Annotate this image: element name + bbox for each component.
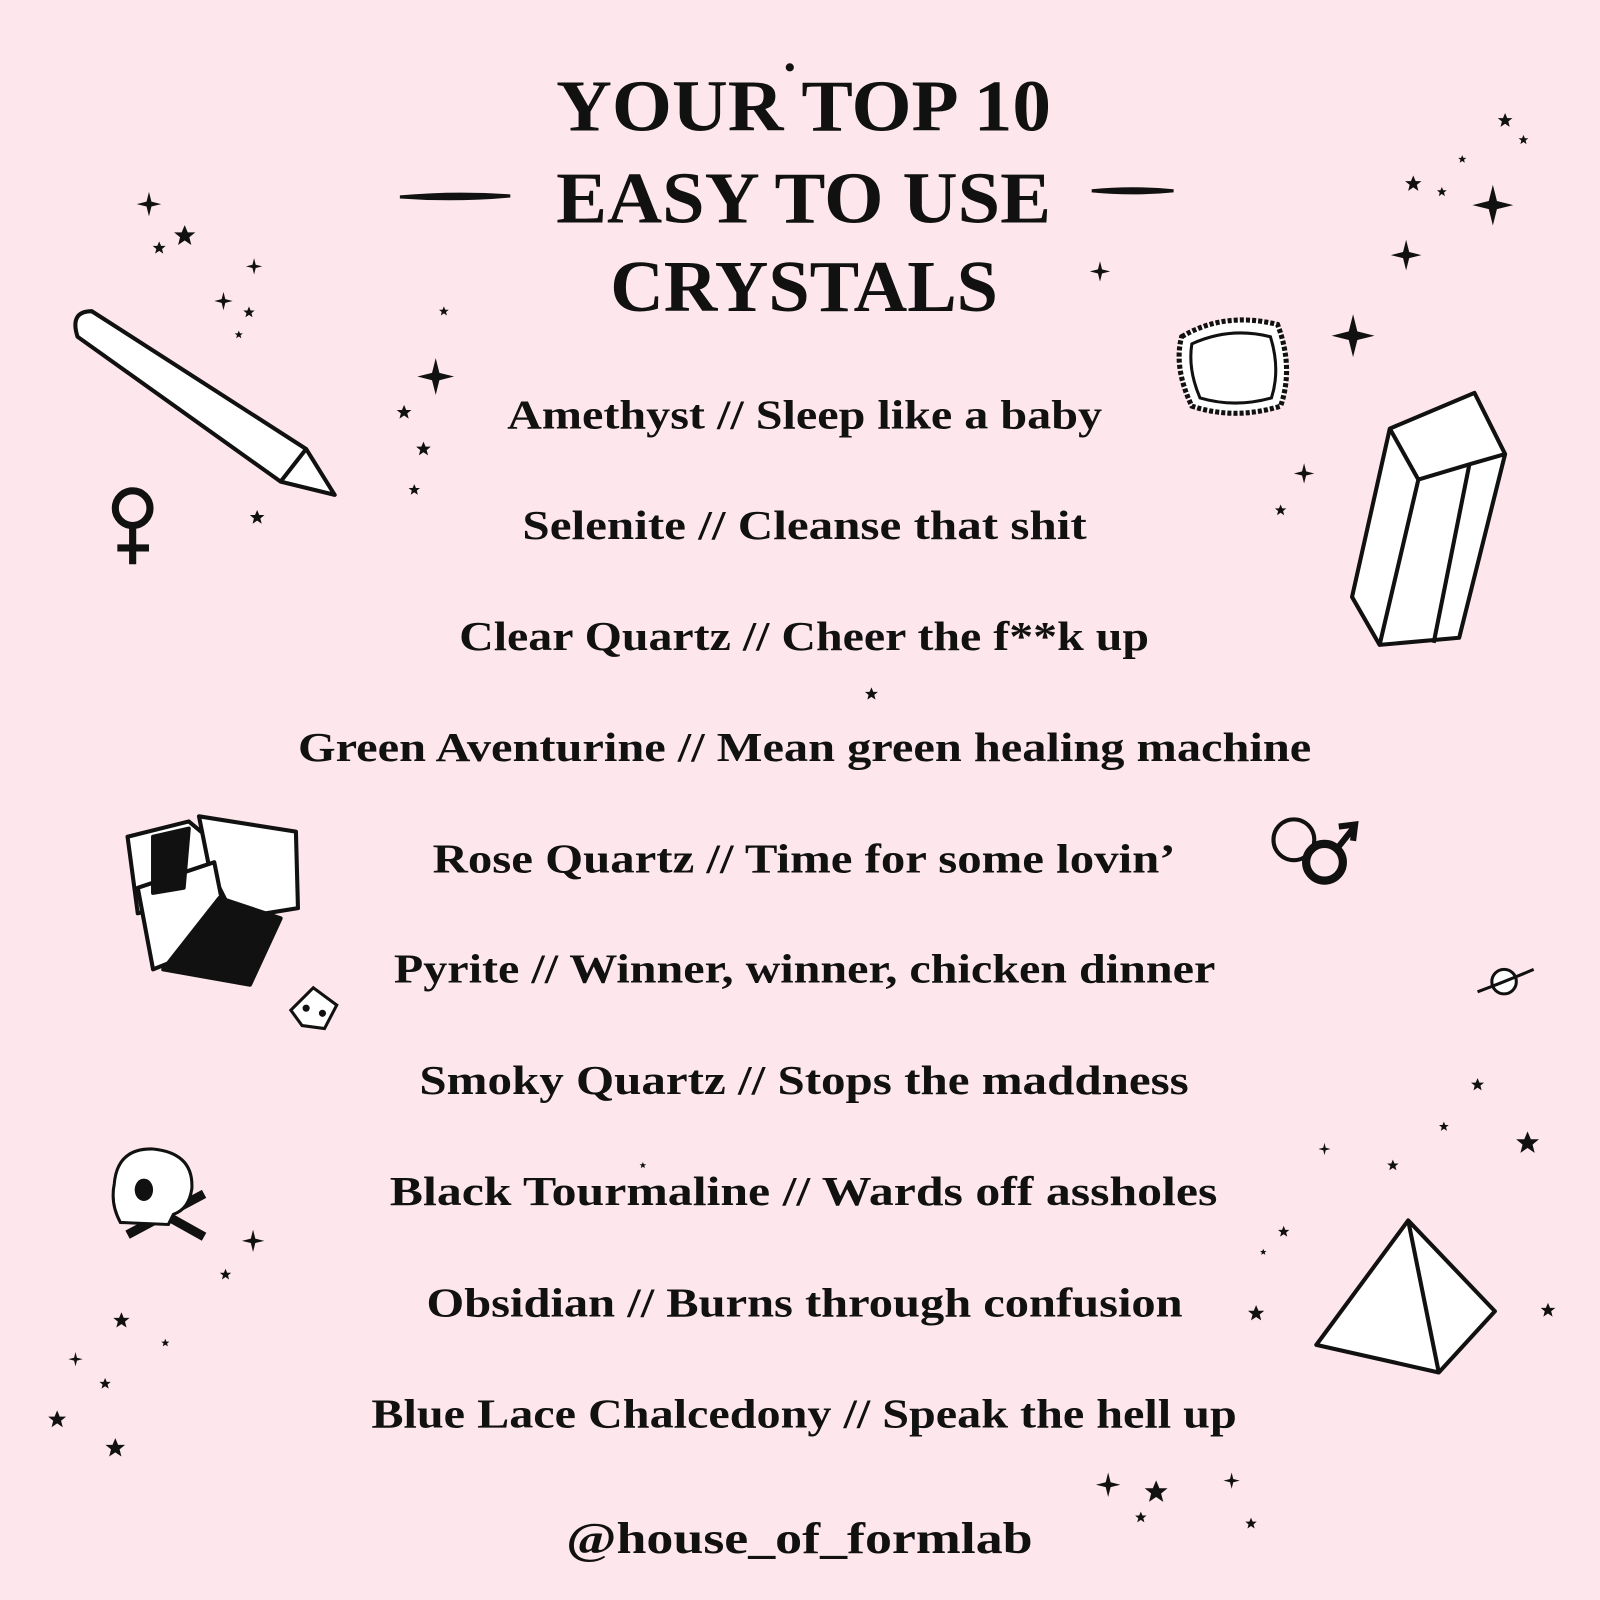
title: EASY TO USE [556,157,1051,238]
crystal list: Clear Quartz // Cheer the f**k up [459,614,1149,659]
icon: saturn [1478,969,1534,994]
icon: venus [115,491,150,564]
icon: wand [75,311,335,495]
footer handle: @house_of_formlab [566,1513,1033,1563]
icon: crystal point [1352,393,1505,645]
icon: crystal cluster [128,816,298,985]
crystal list: Pyrite // Winner, winner, chicken dinner [394,947,1215,992]
crystal list: Blue Lace Chalcedony // Speak the hell up [371,1392,1237,1437]
icon: ring and mars [1273,819,1355,881]
crystal list [298,393,1311,1437]
title: YOUR TOP 10 [556,66,1051,147]
title: CRYSTALS [610,246,998,327]
crystal list: Selenite // Cleanse that shit [522,503,1087,548]
crystal list: Black Tourmaline // Wards off assholes [390,1169,1217,1214]
icon: dice [291,988,337,1029]
icon: skull and crossbones [113,1149,204,1237]
crystal list: Smoky Quartz // Stops the maddness [419,1058,1189,1103]
crystal list: Amethyst // Sleep like a baby [507,393,1102,438]
title [400,63,1173,327]
crystal list: Rose Quartz // Time for some lovin’ [433,836,1176,881]
icon: pillow [1179,320,1287,413]
icon: pyramid [1316,1220,1495,1372]
crystal list: Green Aventurine // Mean green healing machine [298,725,1311,770]
crystal list: Obsidian // Burns through confusion [427,1280,1183,1325]
